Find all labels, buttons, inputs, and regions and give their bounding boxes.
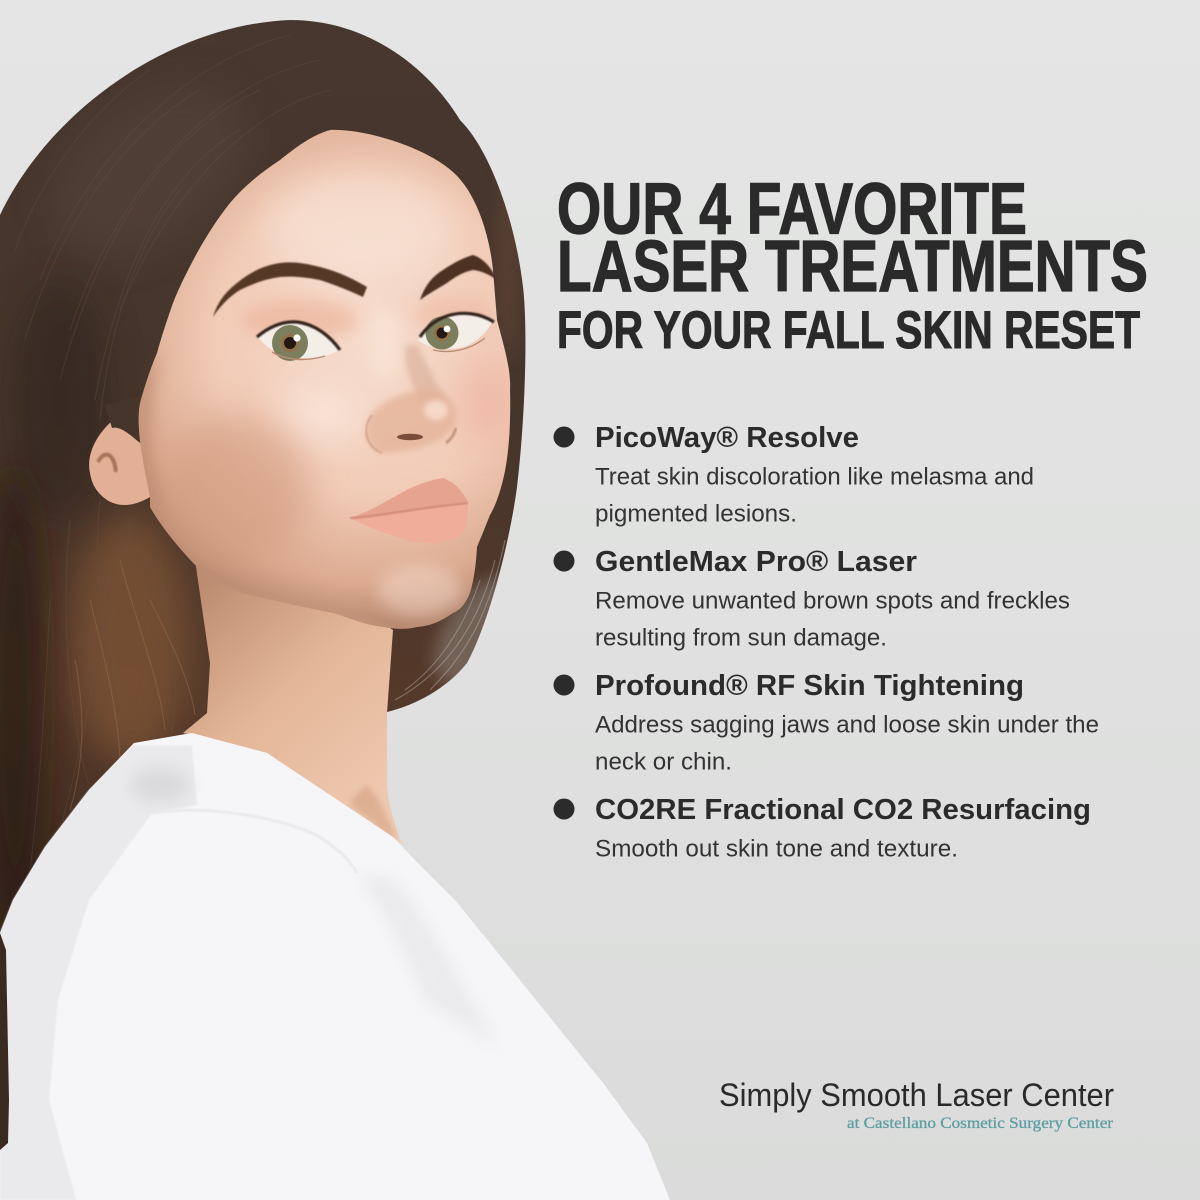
item: GentleMax Pro Laser — [554, 546, 1070, 652]
logo: Simply Smooth Laser Center — [719, 1077, 1114, 1113]
item: CO2RE Fractional CO2 Resurfacing — [554, 794, 1091, 862]
hair strands — [15, 35, 330, 870]
neck — [183, 560, 407, 847]
shirt shoulder shadow — [130, 767, 190, 803]
eye right — [418, 313, 494, 352]
portrait photo — [0, 20, 670, 1200]
shirt — [0, 733, 670, 1200]
eyebrow right — [420, 255, 497, 300]
hair shading — [0, 35, 540, 940]
face — [139, 130, 510, 629]
eyebrow left — [213, 262, 367, 317]
neck shadow — [350, 785, 396, 842]
title — [557, 168, 1148, 360]
shirt back shadow — [0, 745, 197, 1200]
ear shading — [98, 455, 116, 472]
hair over ear — [105, 395, 145, 445]
hair sliver at left edge — [0, 933, 9, 1150]
shirt chest shadow — [357, 873, 500, 1050]
item: CO2RE Fractional CO2 Resurfacing: Smooth out skin tone and texture. — [595, 836, 958, 862]
hair mass — [0, 20, 525, 1150]
item: GentleMax Pro Laser: resulting from sun damage. — [595, 624, 887, 652]
item: CO2RE Fractional CO2 Resurfacing: CO2RE Fractional CO2 Resurfacing — [595, 794, 1091, 826]
nose — [366, 390, 457, 453]
item: GentleMax Pro Laser: GentleMax Pro® Laser — [595, 546, 917, 578]
logo — [719, 1077, 1114, 1132]
item: PicoWay Resolve — [554, 422, 1034, 528]
logo: at Castellano Cosmetic Surgery Center — [847, 1115, 1114, 1132]
treatment list — [554, 422, 1099, 862]
item: Profound RF Skin Tightening: Address sagging jaws and loose skin under the — [595, 712, 1099, 738]
eye left — [257, 322, 340, 361]
title: OUR 4 FAVORITE — [557, 168, 1027, 250]
lips — [350, 478, 468, 543]
item: PicoWay Resolve: Treat skin discoloration like melasma and — [595, 464, 1034, 490]
item: Profound RF Skin Tightening — [554, 670, 1099, 776]
item: Profound RF Skin Tightening: neck or chin. — [595, 748, 732, 776]
item: GentleMax Pro Laser: Remove unwanted brown spots and freckles — [595, 588, 1070, 614]
item: PicoWay Resolve: PicoWay® Resolve — [595, 422, 859, 454]
face shading — [133, 175, 520, 640]
collar seam — [152, 810, 357, 873]
ear — [89, 415, 155, 505]
item: PicoWay Resolve: pigmented lesions. — [595, 500, 797, 528]
item: Profound RF Skin Tightening: Profound® RF Skin Tightening — [595, 670, 1024, 702]
